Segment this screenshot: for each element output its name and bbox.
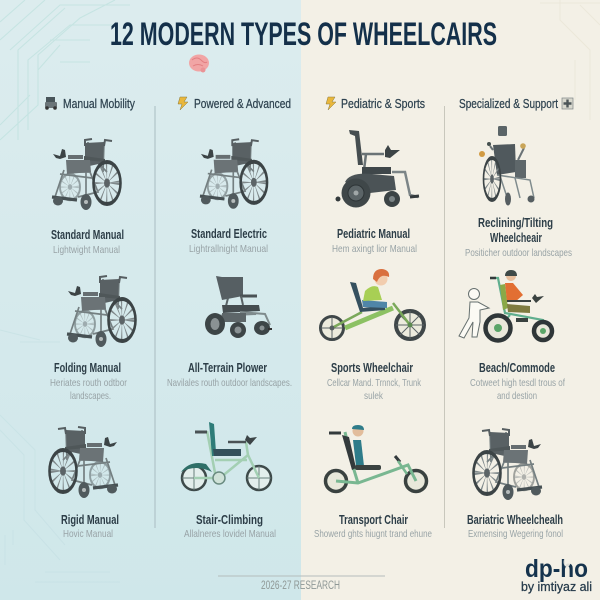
icon: transport chair with rider	[326, 425, 426, 492]
icon: lightning bolt	[326, 97, 336, 110]
card: Folding Manual: landscapes.	[70, 390, 111, 402]
logo: dp-ho by imtiyaz ali	[521, 555, 592, 594]
icon: sports wheelchair with child	[320, 269, 424, 340]
card: Bariatric Wheelchealh	[467, 429, 563, 540]
circuit pattern top right	[540, 0, 600, 120]
card: Folding Manual: Folding Manual	[54, 360, 121, 375]
icon: all-terrain power wheelchair	[205, 276, 272, 338]
icon: stair-climbing chair	[181, 422, 271, 490]
card: Sports Wheelchair: sulek	[364, 390, 384, 402]
column header: Powered & Advanced: Powered & Advanced	[194, 96, 291, 111]
icon: beach wheelchair with attendant	[459, 270, 552, 340]
circuit pattern top left	[0, 0, 130, 140]
card: Folding Manual: Heriates routh odtbor	[50, 377, 127, 389]
logo: dp-ho by imtiyaz ali: dp-ho	[525, 555, 588, 583]
icon: standard electric wheelchair	[200, 139, 267, 209]
card: All-Terrain Plower: Navilales routh outdoor landscapes.	[167, 377, 292, 389]
column header: Powered & Advanced	[178, 96, 291, 111]
card: Stair-Climbing	[181, 422, 276, 540]
card: Pediatric Manual: Hem axingt lior Manual	[332, 243, 417, 255]
circuit pattern bottom left	[0, 330, 120, 582]
card: Pediatric Manual	[332, 130, 419, 255]
footer research label: 2026-27 RESEARCH	[261, 580, 340, 592]
card: Beach/Commode: and destion	[497, 390, 537, 402]
card: Standard Electric	[189, 139, 268, 255]
card: Standard Manual: Standard Manual	[51, 227, 124, 242]
card: Sports Wheelchair: Sports Wheelchair	[331, 360, 413, 375]
card: Standard Electric: Lightrallnight Manual	[189, 243, 268, 255]
column divider right	[444, 106, 445, 528]
icon: lightning bolt	[178, 97, 188, 110]
icon: reclining wheelchair	[479, 126, 534, 206]
card: Standard Manual: Lightwight Manual	[53, 244, 120, 256]
icon: brain	[189, 54, 209, 72]
card: Sports Wheelchair: Cellcar Mand. Trnnck, Trunk	[327, 377, 422, 389]
card: Reclining/Tilting Wheelchair: Reclining/Tilting	[478, 215, 553, 230]
card: All-Terrain Plower	[167, 276, 292, 389]
card: Bariatric Wheelchealh: Bariatric Wheelchealh	[467, 512, 563, 527]
card: Reclining/Tilting Wheelchair	[465, 126, 572, 259]
card: Stair-Climbing: Stair-Climbing	[196, 512, 263, 527]
card: Sports Wheelchair	[320, 269, 424, 402]
icon: medical plus	[562, 98, 573, 109]
card: Transport Chair: Showerd ghts hiugnt trand ehune	[314, 528, 432, 540]
icon: standard manual wheelchair	[52, 139, 120, 210]
icon: folding wheelchair	[67, 276, 136, 347]
column header: Specialized & Support: Specialized & Support	[459, 96, 558, 111]
column divider left	[154, 106, 156, 528]
column header: Manual Mobility: Manual Mobility	[63, 96, 135, 111]
card: Folding Manual	[50, 276, 136, 402]
card: Standard Manual	[51, 139, 124, 256]
card: Standard Electric: Standard Electric	[191, 226, 267, 241]
icon: pediatric power wheelchair	[336, 130, 419, 208]
icon: bariatric wheelchair	[474, 429, 542, 500]
column header: Manual Mobility	[45, 96, 135, 111]
card: Beach/Commode	[459, 270, 565, 402]
card: Reclining/Tilting Wheelchair: Wheelcheair	[490, 230, 542, 245]
card: Stair-Climbing: Allalneres lovidel Manual	[184, 528, 276, 540]
icon: rigid wheelchair	[50, 427, 118, 498]
card: All-Terrain Plower: All-Terrain Plower	[188, 360, 267, 375]
card: Transport Chair	[314, 425, 432, 540]
card: Pediatric Manual: Pediatric Manual	[337, 226, 410, 241]
column header: Pediatric & Sports: Pediatric & Sports	[341, 96, 425, 111]
card: Transport Chair: Transport Chair	[339, 512, 408, 527]
card: Beach/Commode: Beach/Commode	[479, 360, 555, 375]
card: Rigid Manual: Hovic Manual	[63, 528, 113, 540]
logo: dp-ho by imtiyaz ali: by imtiyaz ali	[521, 580, 592, 594]
card: Beach/Commode: Cotweet high tesdl trous of	[470, 377, 565, 389]
card: Bariatric Wheelchealh: Exmensing Wegering fonol	[468, 528, 563, 540]
card: Rigid Manual: Rigid Manual	[61, 512, 119, 527]
icon: manual mobility	[45, 97, 57, 110]
card: Rigid Manual	[50, 427, 119, 540]
